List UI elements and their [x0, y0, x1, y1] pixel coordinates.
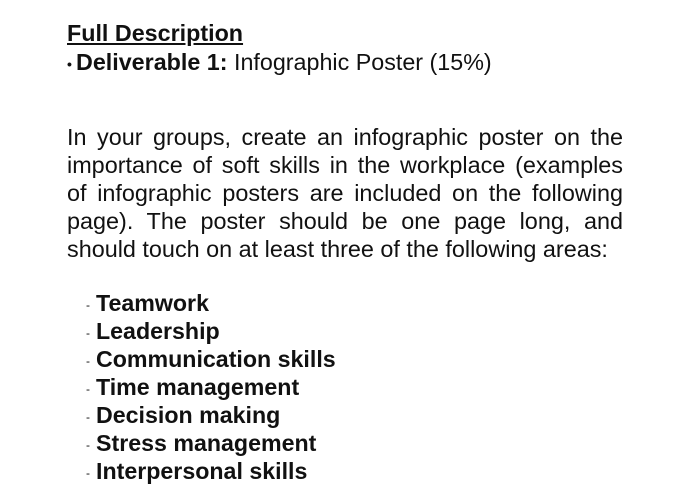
- paragraph: of infographic posters are included on the following: [67, 180, 623, 206]
- list of soft skills: Teamwork: [96, 290, 209, 316]
- list of soft skills: Stress management: [96, 430, 316, 456]
- list of soft skills: [86, 290, 336, 484]
- list of soft skills: -: [86, 382, 90, 396]
- list of soft skills: Time management: [96, 374, 299, 400]
- paragraph: page). The poster should be one page long, and: [67, 208, 623, 234]
- list of soft skills: -: [86, 298, 90, 312]
- list of soft skills: Interpersonal skills: [96, 458, 307, 484]
- deliverable line: Deliverable 1: Infographic Poster (15%): [76, 49, 492, 75]
- list of soft skills: Decision making: [96, 402, 280, 428]
- list of soft skills: -: [86, 354, 90, 368]
- paragraph: [67, 124, 623, 262]
- paragraph: should touch on at least three of the following areas:: [67, 236, 608, 262]
- list of soft skills: -: [86, 326, 90, 340]
- list of soft skills: Communication skills: [96, 346, 336, 372]
- list of soft skills: -: [86, 410, 90, 424]
- list of soft skills: Leadership: [96, 318, 220, 344]
- deliverable line: •: [67, 56, 72, 72]
- heading: Full Description: Full Description: [67, 20, 243, 46]
- list of soft skills: -: [86, 438, 90, 452]
- list of soft skills: -: [86, 466, 90, 480]
- paragraph: importance of soft skills in the workplace (examples: [67, 152, 623, 178]
- paragraph: In your groups, create an infographic poster on the: [67, 124, 623, 150]
